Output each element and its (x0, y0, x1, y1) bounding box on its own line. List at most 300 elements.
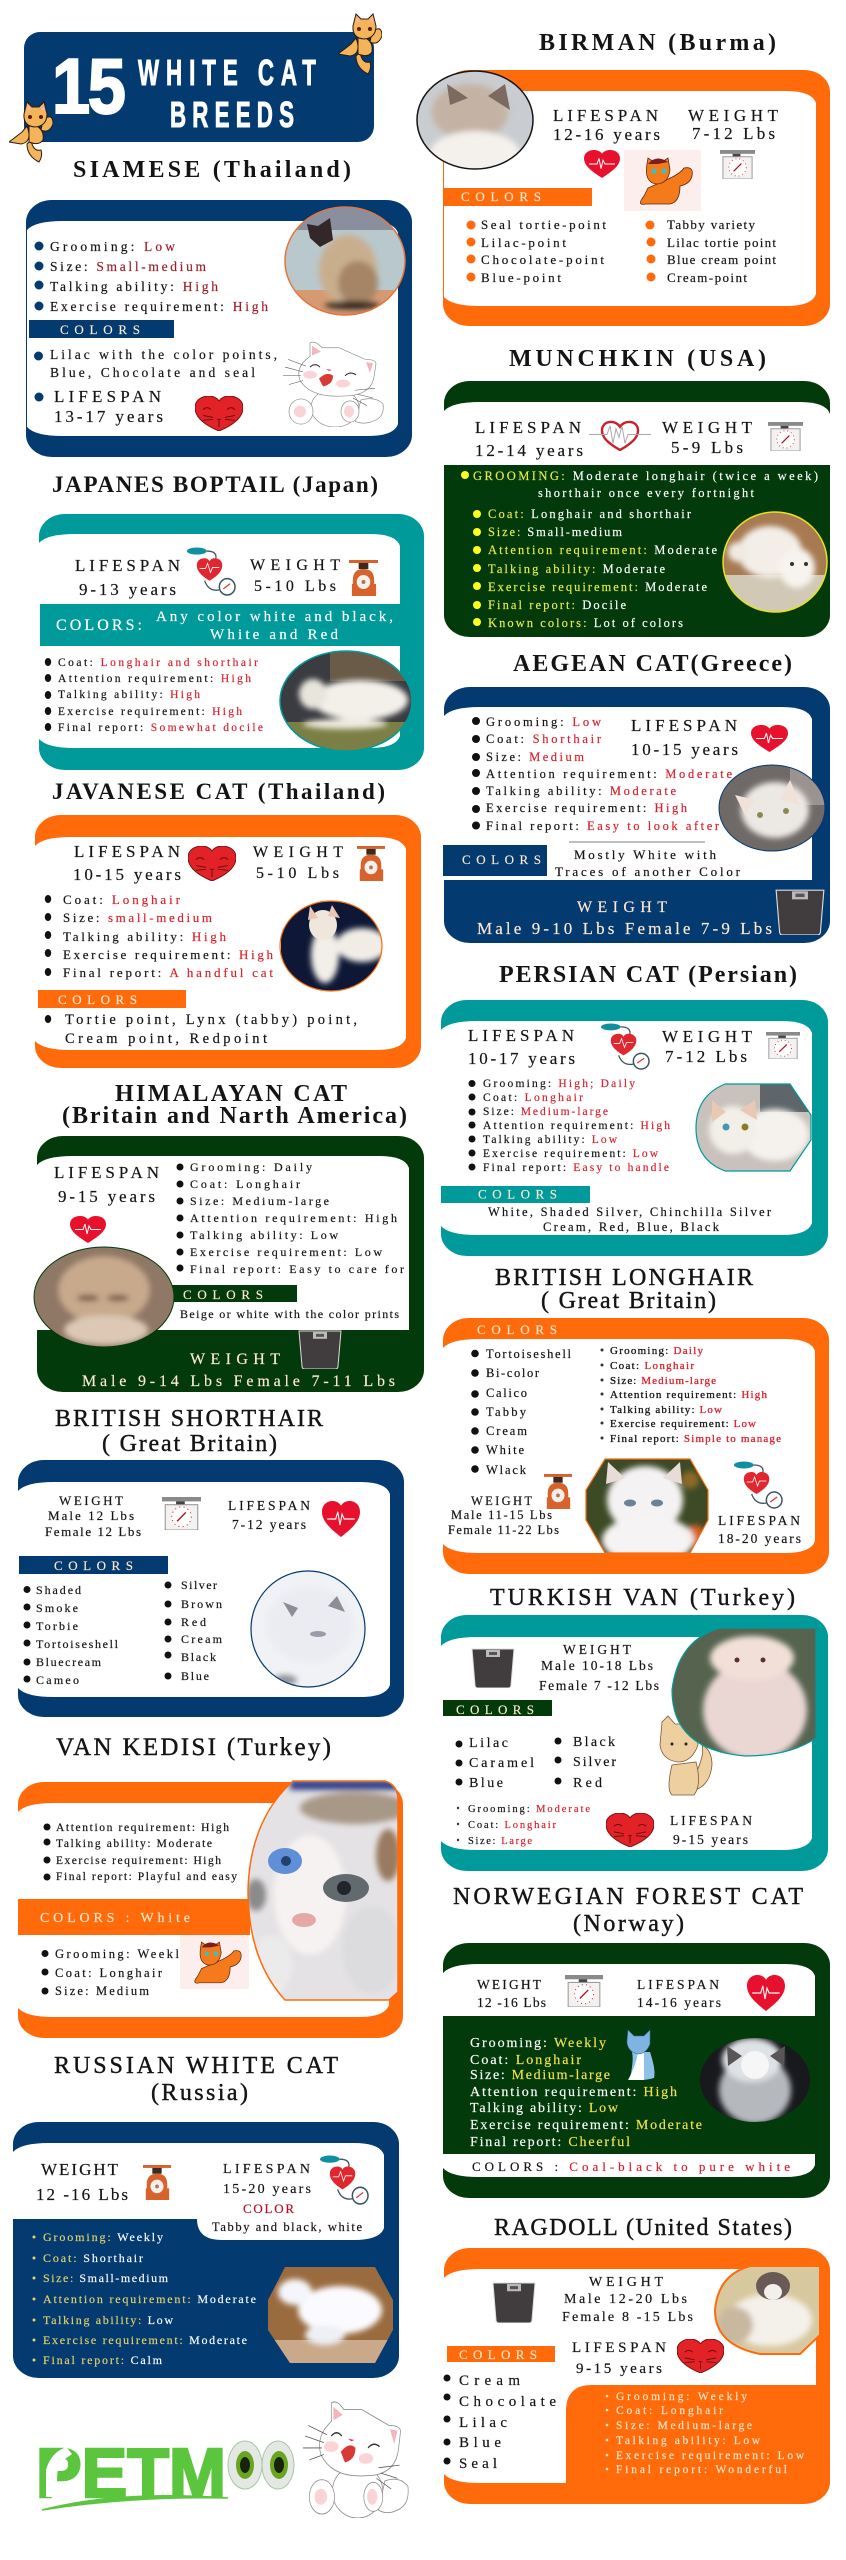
colors text: Beige or white with the color prints (180, 1307, 399, 1321)
lifespan: 12-16 years (553, 125, 660, 144)
lifespan: 9-15 years (673, 1832, 748, 1847)
care traits list upper: Attention requirement: High (56, 1822, 229, 1834)
colors list column 2: Black (573, 1735, 615, 1750)
illustration: white kitten mascot (283, 342, 383, 427)
colors label: COLORS (54, 1558, 133, 1573)
care traits list: Talking ability: Moderate (486, 784, 676, 798)
care traits list: Exercise requirement: Low (616, 2450, 805, 2462)
weight (45, 1493, 141, 1539)
colors text (488, 1205, 772, 1234)
care traits list: GROOMING: Moderate longhair (twice a week) (473, 469, 818, 483)
care traits list: Talking ability: Low (190, 1228, 338, 1242)
care traits list: Exercise requirement: Moderate (470, 2118, 702, 2133)
care traits list (472, 715, 732, 833)
colors list (471, 1347, 572, 1477)
weight (36, 2160, 128, 2204)
lifespan (631, 716, 738, 759)
colors text: Blue, Chocolate and seal (50, 365, 255, 380)
colors list column 1: Cameo (36, 1673, 79, 1687)
weight: 5-10 Lbs (256, 865, 339, 882)
lifespan: LIFESPAN (670, 1813, 752, 1828)
care traits list: Final report: Simple to manage (610, 1433, 781, 1445)
panel: Van Kedisi (18, 1780, 410, 2038)
care traits list: Coat: Longhair (610, 1360, 694, 1372)
weight (662, 418, 753, 457)
colors list column 1: Lilac (469, 1736, 508, 1751)
care traits list: Talking ability: High (50, 279, 218, 294)
care traits list: Grooming: Low (486, 715, 601, 729)
weight: Female 11-22 Lbs (448, 1523, 559, 1537)
icon: blood pressure heart (320, 2156, 368, 2204)
colors list: Calico (486, 1386, 527, 1400)
icon: floor scale (472, 1649, 514, 1688)
care traits list: Attention requirement: High (483, 1120, 670, 1132)
weight (253, 844, 343, 882)
icon: heart with pulse (751, 725, 788, 752)
weight: Male 12 Lbs (48, 1508, 134, 1523)
care traits list: Final report: Docile (488, 598, 626, 612)
care traits list: Coat: Longhair (616, 2405, 723, 2417)
care traits list: Coat: Shorthair (43, 2251, 143, 2265)
weight (448, 1494, 559, 1537)
panel: Norwegian Forest Cat (443, 1943, 830, 2198)
icon: kitchen scale (357, 846, 385, 881)
colors list column 1: Chocolate-point (481, 252, 604, 267)
care traits list lower: Coat: Longhair (55, 1966, 163, 1980)
colors label: COLORS (60, 322, 140, 337)
colors label: COLORS (456, 1702, 534, 1717)
lifespan and color: LIFESPAN (223, 2162, 310, 2177)
photo: Munchkin cat (723, 512, 827, 612)
care traits list: Size: Small-medium (50, 259, 206, 274)
care traits list: Coat: Shorthair (486, 732, 602, 746)
lifespan: LIFESPAN (228, 1498, 310, 1513)
colors label: COLORS (58, 992, 137, 1007)
heading: Munchkin: MUNCHKIN (USA) (509, 346, 766, 372)
lifespan: 9-13 years (79, 580, 176, 599)
care traits list: Exercise requirement: Low (483, 1148, 659, 1160)
title line BREEDS: BREEDS (170, 96, 294, 135)
heading: Ragdoll: RAGDOLL (United States) (494, 2215, 792, 2241)
icon: kitchen scale (544, 1474, 572, 1509)
care traits list: Talking ability: High (63, 929, 227, 944)
panel: Russian White Cat (13, 2122, 399, 2378)
icon: cat heart (188, 846, 236, 881)
photo: Persian cat (696, 1084, 811, 1171)
weight: Female 12 Lbs (45, 1524, 141, 1539)
colors list column 1 (466, 217, 606, 285)
colors text: Traces of another Color (555, 864, 741, 879)
weight (82, 1351, 395, 1390)
lifespan (670, 1813, 752, 1847)
weight (477, 899, 772, 938)
care traits list: Talking ability: Low (43, 2313, 173, 2327)
icon: orange kitten (624, 150, 701, 211)
icon: cat heart (195, 396, 243, 431)
lifespan: LIFESPAN (475, 418, 581, 437)
lifespan: LIFESPAN (468, 1026, 574, 1045)
colors text: Cream, Red, Blue, Black (543, 1220, 720, 1234)
lifespan: 10-15 years (631, 740, 738, 759)
care traits list: Size: Medium-large (190, 1194, 329, 1208)
icon: clock scale (766, 1032, 800, 1059)
weight: WEIGHT (662, 1027, 753, 1046)
photo: Himalayan cat (34, 1247, 174, 1347)
photo: Van Kedisi kitten (246, 1780, 410, 2000)
photo: British Longhair cat (586, 1459, 708, 1564)
colors label (172, 1285, 297, 1302)
photo: Russian white cat (268, 2267, 393, 2363)
care traits list: Coat: Longhair (483, 1092, 583, 1104)
care traits list: Talking ability: High (58, 689, 200, 701)
lifespan (572, 2340, 666, 2377)
care traits list: Size: Small-medium (488, 525, 622, 539)
colors list: White (486, 1443, 524, 1457)
weight: WEIGHT (471, 1494, 532, 1508)
colors list column 2 (164, 1578, 223, 1683)
colors label: COLORS (183, 1287, 263, 1302)
heading: Japanes Boptail: JAPANES BOPTAIL (Japan) (52, 472, 378, 497)
weight: WEIGHT (190, 1351, 280, 1368)
care traits list: Attention requirement: High (470, 2085, 677, 2100)
care traits list (600, 1345, 781, 1445)
care traits list: Grooming: Weekly (616, 2391, 747, 2403)
photo: Birman cat (416, 71, 534, 179)
heading: Persian Cat: PERSIAN CAT (Persian) (499, 962, 797, 988)
care traits list: Size: small-medium (63, 910, 212, 925)
care traits list lower: Size: Medium (55, 1984, 149, 1998)
logo dog silhouette (46, 2447, 72, 2497)
colors label: COLORS (477, 1322, 557, 1337)
lifespan: 18-20 years (718, 1531, 801, 1546)
care traits list: Final report: Easy to care for (190, 1262, 404, 1276)
colors label: COLORS (461, 189, 541, 204)
weight: WEIGHT (253, 844, 343, 861)
care traits list: Final report: Easy to look after (486, 819, 720, 833)
colors list column 2: Red (181, 1615, 206, 1629)
care traits list: Exercise requirement: Moderate (43, 2333, 247, 2347)
heading: Norwegian Forest Cat (453, 1884, 803, 1937)
colors label (19, 1556, 168, 1574)
colors label: COLORS (459, 2347, 537, 2362)
panel: Ragdoll (444, 2248, 830, 2504)
colors list: Cream (459, 2373, 520, 2389)
colors list column 1: Seal tortie-point (481, 217, 606, 232)
colors label (29, 320, 174, 338)
care traits list: Size: Medium-large (616, 2420, 752, 2432)
colors list column 2 (554, 1735, 616, 1791)
colors list column 2: Brown (181, 1597, 222, 1611)
lifespan (637, 1977, 721, 2010)
care traits list: Attention requirement: High (58, 673, 251, 685)
colors list column 2 (646, 217, 776, 285)
heading: British Shorthair: BRITISH SHORTHAIR (55, 1406, 323, 1432)
illustration: beige cat (660, 1716, 712, 1795)
photo: Aegean cat (719, 765, 825, 851)
colors text: Tortie point, Lynx (tabby) point, (65, 1012, 357, 1028)
title line WHITE CAT: WHITE CAT (138, 54, 316, 93)
panel: Persian Cat (441, 1000, 828, 1256)
icon: clock scale (768, 422, 803, 451)
care traits list: Final report: Easy to handle (483, 1162, 669, 1174)
weight: Male 10-18 Lbs (541, 1658, 653, 1673)
care traits list: Exercise requirement: High (50, 299, 268, 314)
photo: Ragdoll cat (715, 2266, 820, 2354)
colors text: Mostly White with (574, 847, 716, 862)
weight: 12 -16 Lbs (477, 1995, 546, 2010)
care traits list upper: Exercise requirement: High (56, 1855, 221, 1867)
icon: heart outline with pulse (589, 422, 651, 450)
care traits list: Grooming: Weekly (43, 2230, 163, 2244)
care traits list (34, 239, 268, 314)
colors label (444, 188, 592, 206)
care traits list: Size: Medium-large (610, 1375, 716, 1387)
care traits list: Coat: Longhair (468, 1820, 556, 1831)
weight (562, 2275, 693, 2325)
icon: blood pressure heart (187, 548, 235, 595)
lifespan: 10-17 years (468, 1049, 575, 1068)
colors list column 1: Torbie (36, 1619, 78, 1633)
panel: Turkish Van (441, 1615, 828, 1871)
care traits list: Final report: Wonderful (616, 2464, 787, 2476)
colors list column 2: Blue (181, 1669, 209, 1683)
care traits list: Talking ability: Low (483, 1134, 618, 1146)
colors label: COLORS (462, 852, 541, 867)
lifespan: LIFESPAN (631, 716, 737, 735)
photo: Siamese cat (285, 206, 406, 316)
care traits list: Grooming: Daily (610, 1345, 704, 1357)
care traits list: Attention requirement: High (190, 1211, 397, 1225)
care traits list (457, 1804, 590, 1847)
care traits list lower: Grooming: Weekl (55, 1947, 180, 1961)
colors label (38, 990, 186, 1008)
colors text (555, 842, 741, 879)
lifespan (34, 387, 163, 426)
lifespan: LIFESPAN (572, 2340, 666, 2356)
lifespan: LIFESPAN (718, 1513, 800, 1528)
colors list column 2: Cream (181, 1632, 223, 1646)
care traits list: Coat: Longhair and shorthair (488, 507, 692, 521)
lifespan: 13-17 years (54, 407, 163, 426)
panel: Japanes Boptail (39, 514, 424, 770)
colors strip (443, 2154, 815, 2177)
photo: Turkish Van cat (672, 1628, 816, 1760)
lifespan and color (212, 2162, 362, 2234)
colors label (441, 1186, 590, 1203)
care traits list (461, 469, 818, 630)
icon: heart with pulse (584, 150, 620, 178)
colors list: Tabby (486, 1405, 527, 1419)
colors list: Chocolate (459, 2394, 556, 2410)
care traits list: Final report: Somewhat docile (58, 722, 263, 734)
care traits list: Size: Medium-large (470, 2068, 610, 2083)
photo: British Shorthair cat (251, 1571, 365, 1687)
colors band: Any color white and black, (156, 609, 393, 625)
icon: orange cat top right (338, 14, 382, 74)
colors text: Cream point, Redpoint (65, 1031, 267, 1047)
lifespan: 9-15 years (576, 2361, 662, 2377)
lifespan: 9-15 years (58, 1187, 155, 1206)
care traits list (176, 1160, 404, 1276)
lifespan and color: 15-20 years (223, 2182, 311, 2197)
care traits list: Exercise requirement: High (63, 947, 274, 962)
care traits list (32, 2230, 256, 2367)
weight (477, 1977, 546, 2010)
care traits list: Talking ability: Low (470, 2101, 619, 2116)
heading: Himalayan Cat: (Britain and Narth America) (62, 1103, 407, 1129)
colors list column 2: Red (573, 1776, 602, 1791)
care traits list: Grooming: Moderate (468, 1804, 590, 1815)
icon: orange cat bottom left (9, 102, 53, 162)
lifespan and color: Tabby and black, white (212, 2220, 362, 2234)
care traits list (45, 892, 273, 980)
colors list column 1: Tortoiseshell (36, 1637, 119, 1651)
colors list column 2: Black (181, 1650, 216, 1664)
weight: WEIGHT (589, 2275, 663, 2290)
lifespan (228, 1498, 310, 1532)
panel: Javanese Cat (35, 815, 421, 1068)
heading: Russian White Cat (54, 2053, 338, 2106)
lifespan (718, 1513, 801, 1546)
panel: Birman (416, 70, 830, 326)
colors list (444, 2373, 556, 2472)
colors list column 1 (24, 1583, 119, 1687)
heading: Norwegian Forest Cat: (Norway) (573, 1911, 684, 1937)
panel: Siamese (26, 200, 412, 457)
colors list column 1: Lilac-point (481, 235, 566, 250)
care traits list upper: Final report: Playful and easy (56, 1871, 237, 1883)
weight (539, 1642, 659, 1693)
care traits list: Attention requirement: Moderate (486, 767, 732, 781)
care traits list: Exercise requirement: High (58, 706, 242, 718)
care traits list: Grooming: Weekly (470, 2036, 606, 2051)
colors list column 1: Bluecream (36, 1655, 102, 1669)
icon: orange kitten (180, 1935, 249, 1989)
care traits list: Talking ability: Moderate (488, 562, 665, 576)
icon: heart with pulse (322, 1501, 360, 1537)
photo: Javanese cat (280, 900, 388, 992)
lifespan (553, 106, 660, 144)
colors list column 2: Silver (181, 1578, 217, 1592)
icon: cat heart (606, 1813, 654, 1847)
care traits list: Grooming: High; Daily (483, 1078, 635, 1090)
heading: British Shorthair (55, 1406, 323, 1457)
colors list column 1: Caramel (469, 1756, 534, 1771)
icon: floor scale (493, 2283, 535, 2323)
colors list column 2: Blue cream point (667, 252, 776, 267)
heading: Himalayan Cat: HIMALAYAN CAT (115, 1081, 347, 1107)
lifespan: 7-12 years (232, 1517, 306, 1532)
logo swoosh (42, 2496, 228, 2510)
care traits list (468, 1078, 670, 1174)
colors list: Bi-color (486, 1366, 540, 1380)
colors list column 1: Blue-point (481, 270, 561, 285)
colors band: White and Red (210, 627, 338, 643)
care traits list upper: Talking ability: Moderate (56, 1838, 212, 1850)
weight: 12 -16 Lbs (36, 2185, 128, 2204)
care traits list: Exercise requirement: Low (190, 1245, 382, 1259)
colors list: Seal (459, 2456, 497, 2472)
colors text: Lilac with the color points, (50, 347, 277, 362)
care traits list (470, 2036, 702, 2150)
panel: British Longhair (443, 1318, 829, 1574)
care traits list: Size: Medium (486, 750, 584, 764)
icon: blood pressure heart (601, 1023, 649, 1069)
care traits list: Exercise requirement: Low (610, 1418, 756, 1430)
heading: Russian White Cat: RUSSIAN WHITE CAT (54, 2053, 338, 2079)
colors list column 2: Cream-point (667, 270, 747, 285)
weight: Male 12-20 Lbs (564, 2292, 687, 2307)
care traits list (45, 657, 263, 734)
icon: heart with pulse (70, 1216, 106, 1243)
lifespan (475, 418, 583, 460)
care traits list: Coat: Longhair (190, 1177, 300, 1191)
logo: PETMOO: PETM (36, 2434, 226, 2512)
weight: WEIGHT (477, 1977, 542, 1992)
care traits list: Known colors: Lot of colors (488, 616, 683, 630)
logo eyes (228, 2441, 294, 2489)
icon: kitchen scale (143, 2165, 171, 2200)
care traits list: Talking ability: Low (610, 1404, 722, 1416)
colors strip: COLORS : Coal-black to pure white (472, 2159, 790, 2174)
care traits list: Final report: Calm (43, 2353, 163, 2367)
heading: British Longhair (495, 1265, 753, 1314)
care traits list: Final report: Cheerful (470, 2135, 630, 2150)
icon: floor scale (299, 1331, 341, 1369)
panel: Aegean Cat (443, 687, 830, 943)
heading: British Longhair: ( Great Britain) (541, 1288, 716, 1314)
care traits list: Exercise requirement: High (486, 801, 688, 815)
lifespan (54, 1163, 159, 1206)
colors list: Cream (486, 1424, 527, 1438)
heading: Aegean Cat: AEGEAN CAT(Greece) (513, 651, 792, 677)
lifespan: LIFESPAN (637, 1977, 719, 1992)
weight: 7-12 Lbs (665, 1047, 747, 1066)
weight (688, 106, 779, 143)
heading: Van Kedisi: VAN KEDISI (Turkey) (56, 1734, 331, 1761)
colors list column 2: Tabby variety (667, 217, 756, 232)
heading: British Longhair: BRITISH LONGHAIR (495, 1265, 753, 1291)
colors band: COLORS : White (40, 1911, 190, 1926)
heading: Norwegian Forest Cat: NORWEGIAN FOREST CAT (453, 1884, 803, 1910)
lifespan: 12-14 years (475, 441, 583, 460)
weight: Male 9-10 Lbs Female 7-9 Lbs (477, 919, 772, 938)
weight: WEIGHT (250, 557, 340, 574)
lifespan (73, 842, 181, 884)
icon: floor scale (776, 890, 824, 935)
illustration: blue cat (627, 2030, 654, 2080)
weight: 7-12 Lbs (692, 124, 775, 143)
heading: Himalayan Cat (62, 1081, 407, 1129)
photo: Japanese Bobtail cat (280, 651, 412, 752)
weight: 5-10 Lbs (254, 578, 336, 595)
care traits list: Final report: A handful cat (63, 965, 273, 980)
heading: Russian White Cat: (Russia) (151, 2080, 248, 2106)
weight: WEIGHT (688, 106, 779, 125)
colors list: Wlack (486, 1463, 527, 1477)
care traits list upper (44, 1822, 237, 1883)
lifespan: LIFESPAN (75, 556, 180, 575)
weight: WEIGHT (662, 418, 753, 437)
lifespan and color: COLOR (243, 2201, 294, 2216)
weight: Male 11-15 Lbs (451, 1508, 552, 1522)
weight: WEIGHT (563, 1642, 632, 1657)
weight (662, 1027, 753, 1066)
care traits list: Grooming: Low (50, 239, 175, 254)
care traits list: Attention requirement: Moderate (488, 543, 717, 557)
colors label: COLORS (478, 1186, 557, 1202)
colors list: Tortoiseshell (486, 1347, 572, 1361)
